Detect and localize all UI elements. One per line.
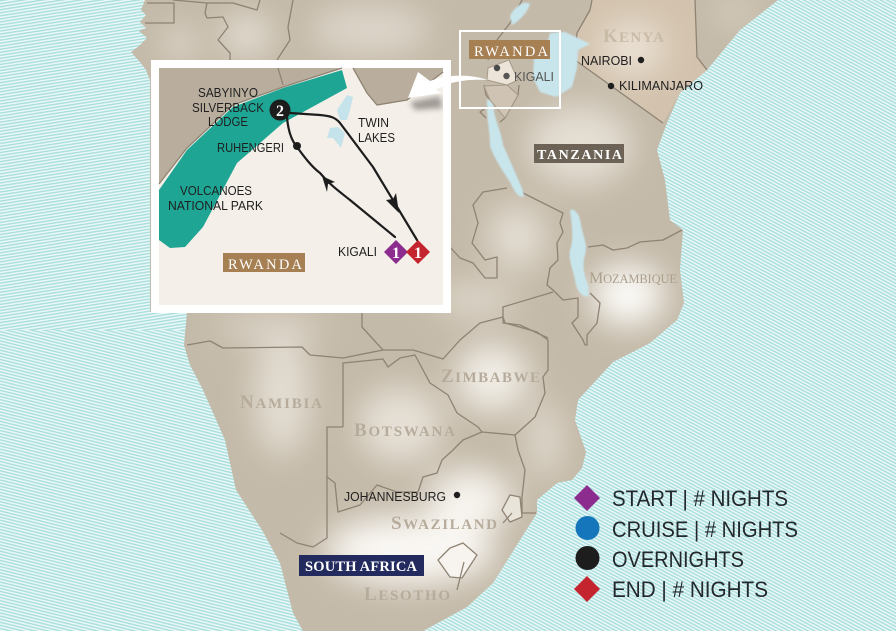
inset map: Rwanda	[151, 60, 451, 313]
inset: arrowheads	[322, 176, 399, 213]
inset: end marker: 1	[414, 245, 422, 262]
inset: labels: KIGALI	[338, 244, 377, 259]
country labels: MOZAMBIQUE	[589, 270, 677, 287]
inset: start marker: 1	[392, 245, 400, 262]
inset: end marker	[406, 240, 430, 264]
legend	[574, 485, 798, 602]
inset: labels: SABYINYO	[198, 85, 258, 100]
city labels with dots: KILIMANJARO	[619, 78, 703, 93]
inset: labels	[168, 85, 395, 259]
country labels	[240, 26, 677, 605]
country labels: ZIMBABWE	[441, 366, 540, 387]
inset: labels: LODGE	[208, 114, 248, 129]
inset: labels: TWIN	[358, 115, 389, 130]
legend: overnights: OVERNIGHTS	[612, 547, 744, 572]
Rwanda locator box	[460, 31, 560, 108]
label: South Africa	[299, 555, 424, 576]
inset: labels: RUHENGERI	[217, 140, 284, 155]
inset: Rwanda label: RWANDA	[228, 257, 303, 273]
country labels: SWAZILAND	[391, 513, 497, 534]
land mass of southern Africa	[131, 0, 778, 631]
inset: Ruhengeri dot	[293, 142, 301, 150]
city labels with dots: NAIROBI	[581, 53, 632, 68]
lakes	[487, 3, 590, 296]
inset: labels: NATIONAL PARK	[168, 198, 263, 213]
country borders	[145, 0, 707, 590]
inset: route	[287, 113, 417, 240]
inset: twin lakes	[327, 95, 353, 148]
inset: neighbouring land	[159, 68, 443, 184]
legend: overnights	[576, 546, 744, 572]
Rwanda locator box: KIGALI	[514, 69, 554, 84]
Rwanda and Burundi on main map	[484, 60, 518, 118]
country labels: KENYA	[603, 26, 664, 47]
Rwanda locator box: RWANDA	[474, 44, 549, 60]
inset: start marker	[384, 240, 408, 264]
legend: start: START | # NIGHTS	[612, 486, 788, 511]
inset: labels: SILVERBACK	[192, 100, 264, 115]
arrow from locator to inset	[408, 72, 488, 110]
label: Tanzania: TANZANIA	[537, 148, 623, 163]
inset: labels: LAKES	[358, 130, 395, 145]
inset: national park area	[159, 70, 347, 248]
inset: labels: VOLCANOES	[180, 183, 252, 198]
city labels with dots: JOHANNESBURG	[344, 489, 446, 504]
country labels: NAMIBIA	[240, 392, 322, 413]
label: South Africa: SOUTH AFRICA	[305, 559, 418, 575]
country labels: LESOTHO	[364, 584, 450, 605]
inset: overnight marker: 2	[276, 103, 284, 120]
country labels: BOTSWANA	[354, 420, 455, 441]
inset: overnight marker	[270, 100, 290, 120]
legend: cruise: CRUISE | # NIGHTS	[612, 517, 798, 542]
city labels with dots	[344, 53, 703, 504]
legend: end: END | # NIGHTS	[612, 577, 768, 602]
